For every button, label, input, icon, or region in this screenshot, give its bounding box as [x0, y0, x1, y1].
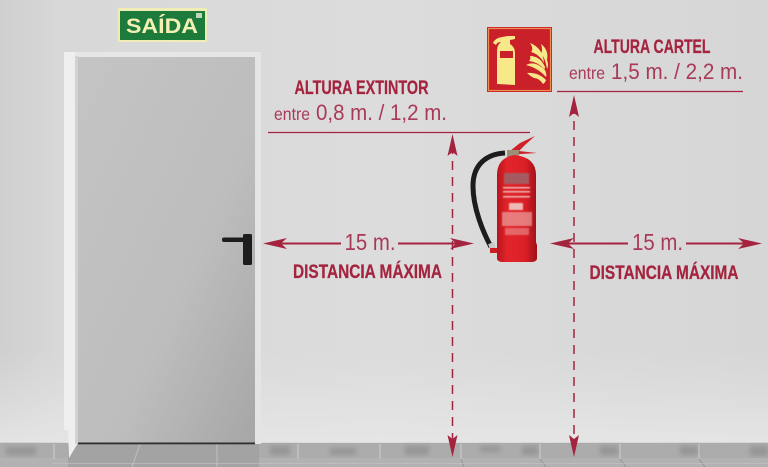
right horizontal distance arrow [550, 229, 762, 255]
range text: 1,5 m. / 2,2 m. [611, 59, 743, 84]
fire extinguisher sign [487, 27, 552, 92]
door [64, 52, 261, 458]
exit sign: SAÍDA [126, 13, 198, 38]
heading: ALTURA CARTEL [594, 36, 711, 58]
vertical arrow: extinguisher height [448, 134, 458, 457]
extinguisher label [502, 173, 532, 235]
door frame left [64, 52, 78, 458]
entre label: entre [569, 63, 605, 83]
hose nozzle [488, 242, 496, 251]
door handle [222, 234, 252, 265]
hose [473, 153, 505, 247]
left horizontal distance arrow: 15 m. [344, 229, 396, 255]
flame pictogram [526, 43, 548, 84]
door leaf [78, 57, 255, 443]
left maximum distance label: DISTANCIA MÁXIMA [293, 260, 442, 283]
cylinder [497, 155, 537, 262]
entre label: entre [274, 104, 310, 124]
skirting and floor [0, 443, 768, 467]
vertical arrow: sign height [569, 95, 579, 457]
door frame right [255, 54, 261, 444]
left height annotation [268, 77, 530, 132]
extinguisher [473, 136, 537, 262]
door frame top [64, 52, 261, 57]
range text: 0,8 m. / 1,2 m. [316, 100, 447, 125]
right horizontal distance arrow: 15 m. [632, 229, 683, 255]
left horizontal distance arrow [263, 229, 474, 255]
valve and lever [510, 136, 537, 155]
heading: ALTURA EXTINTOR [294, 77, 428, 99]
right height annotation [557, 36, 743, 92]
threshold floor [68, 444, 259, 467]
extinguisher pictogram [493, 36, 515, 85]
exit sign [118, 8, 207, 42]
